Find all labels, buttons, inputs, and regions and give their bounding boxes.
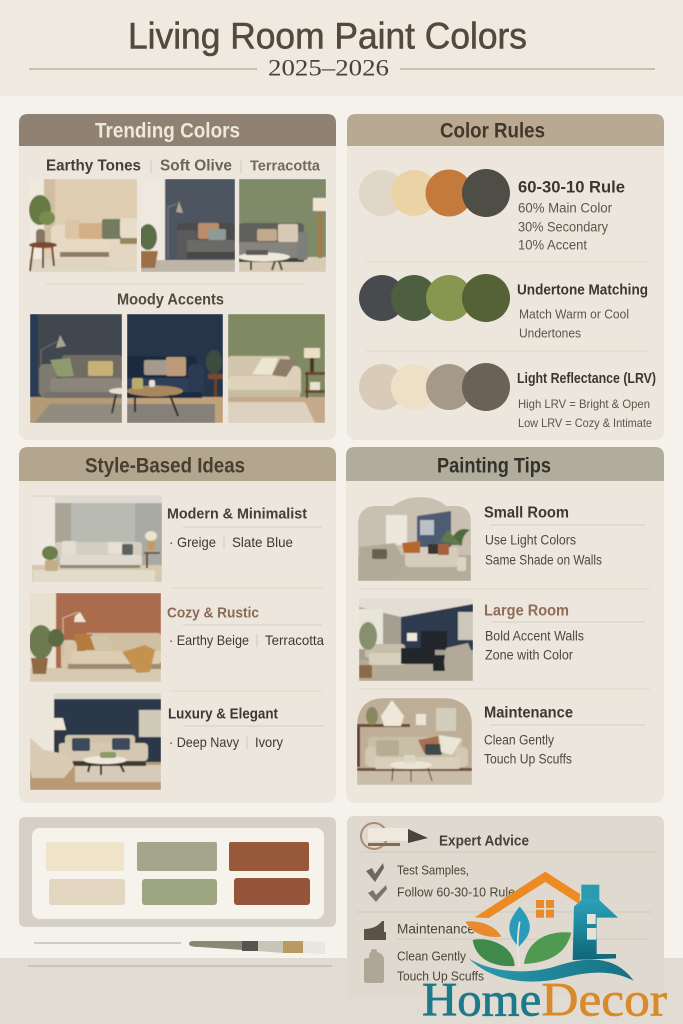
text: maintenance tips: Maintenance (484, 704, 573, 722)
swatches: bottom row (49, 878, 310, 905)
photo: luxury elegant room (30, 693, 161, 790)
text: 60-30-10 rule: 60% Main Color (518, 200, 612, 216)
photo: modern minimalist room (32, 495, 162, 582)
photo: soft olive room (139, 179, 235, 272)
text: small room: Use Light Colors (485, 532, 576, 548)
heading: style-based ideas (19, 447, 336, 481)
text: large room: Bold Accent Walls (485, 628, 584, 644)
swatches: 60-30-10 (359, 169, 510, 217)
text: clean instructions: Touch Up Scuffs (397, 968, 484, 984)
text: light reflectance: High LRV = Bright & Open (518, 397, 650, 411)
panel: paint swatches (19, 817, 336, 927)
text: cozy & rustic: Cozy & Rustic (167, 604, 259, 622)
heading: style-based ideas: Style-Based Ideas (85, 454, 245, 478)
heading: color rules: Color Rules (440, 120, 545, 142)
swatches: light reflectance (359, 363, 510, 411)
logo leaves (465, 907, 571, 967)
logo wordmark (422, 975, 667, 1024)
text: 60-30-10 rule: 30% Secondary (518, 220, 608, 234)
brush line (34, 942, 181, 944)
text: undertone matching: Undertone Matching (517, 282, 648, 298)
text: undertone matching: Match Warm or Cool (519, 306, 629, 322)
text: modern & minimalist: Modern & Minimalist (167, 506, 307, 522)
heading: moody accents: Moody Accents (117, 292, 224, 308)
heading: expert advice: Expert Advice (439, 832, 529, 850)
text: undertone matching: Undertones (519, 326, 581, 340)
panel: color rules (347, 114, 664, 440)
title (29, 16, 655, 80)
icon: maintenance scraper (364, 921, 386, 940)
photo: moody charcoal room (30, 314, 131, 423)
text: maintenance heading: Maintenance (397, 922, 475, 936)
text: luxury & elegant: · Deep Navy (169, 734, 239, 750)
text: large room (484, 602, 645, 662)
logo wave (469, 958, 634, 982)
photo: cozy rustic room (29, 593, 161, 682)
text: undertone matching (517, 282, 648, 340)
text: 60-30-10 rule: 60-30-10 Rule (518, 178, 625, 196)
text: luxury & elegant: Luxury & Elegant (168, 706, 278, 722)
heading: color rules (347, 114, 664, 146)
text: small room (484, 504, 645, 568)
icon: check 1 (366, 863, 384, 882)
photo: earthy tones room (29, 179, 137, 272)
text: small room: Small Room (484, 504, 569, 522)
text: 60-30-10 rule (518, 178, 625, 252)
panel: trending colors (19, 114, 336, 440)
text: luxury & elegant: Ivory (255, 734, 283, 750)
text: light reflectance: Light Reflectance (LRV) (517, 371, 656, 387)
photo: maintenance room (357, 698, 472, 785)
icon: pen (361, 823, 428, 849)
text: large room: Large Room (484, 602, 569, 620)
colour labels: Soft Olive (160, 158, 232, 174)
photo: moody navy room (127, 314, 223, 423)
panel: expert advice (347, 816, 664, 998)
heading: trending colors (19, 114, 336, 146)
text: cozy & rustic (167, 604, 324, 648)
text: cozy & rustic: · Earthy Beige (169, 632, 249, 648)
text: small room: Same Shade on Walls (485, 552, 602, 568)
photo: large room (359, 598, 473, 681)
text: clean instructions (397, 948, 484, 984)
panel: style-based ideas (19, 447, 336, 803)
text: modern & minimalist (167, 506, 322, 550)
text: large room: Zone with Color (485, 648, 573, 662)
text: cozy & rustic: Terracotta (265, 632, 324, 648)
title: 2025–2026 (268, 56, 389, 80)
text: luxury & elegant (168, 706, 324, 750)
heading: painting tips: Painting Tips (437, 454, 551, 478)
text: 60-30-10 rule: 10% Accent (518, 238, 587, 252)
text: light reflectance (517, 371, 656, 430)
swatches: top row (46, 842, 309, 871)
photo: terracotta room (238, 179, 326, 272)
colour labels (46, 158, 321, 174)
title: Living Room Paint Colors (128, 16, 527, 56)
heading: painting tips (346, 447, 664, 481)
text: modern & minimalist: · Greige (169, 534, 216, 550)
text: light reflectance: Low LRV = Cozy & Intimate (518, 416, 652, 430)
swatches: undertones (359, 274, 510, 322)
text: maintenance tips: Touch Up Scuffs (484, 752, 572, 766)
icon: cleaner bottle (364, 949, 384, 983)
panel: painting tips (346, 447, 664, 803)
colour labels: Earthy Tones (46, 158, 141, 174)
text: maintenance tips: Clean Gently (484, 732, 554, 748)
photo: moody olive room (228, 314, 325, 423)
text: follow rule: Follow 60-30-10 Rule (397, 884, 515, 900)
logo house (475, 872, 618, 960)
photo: small room (358, 497, 471, 581)
colour labels: Terracotta (250, 158, 321, 174)
text: clean instructions: Clean Gently (397, 948, 466, 964)
text: maintenance tips (484, 704, 645, 766)
text: modern & minimalist: Slate Blue (232, 534, 293, 550)
logo: HomeDecor (422, 872, 667, 1024)
icon: check 2 (368, 885, 387, 902)
heading: trending colors: Trending Colors (95, 120, 240, 142)
icon: paint brush (189, 941, 325, 954)
text: test samples: Test Samples, (397, 862, 469, 878)
